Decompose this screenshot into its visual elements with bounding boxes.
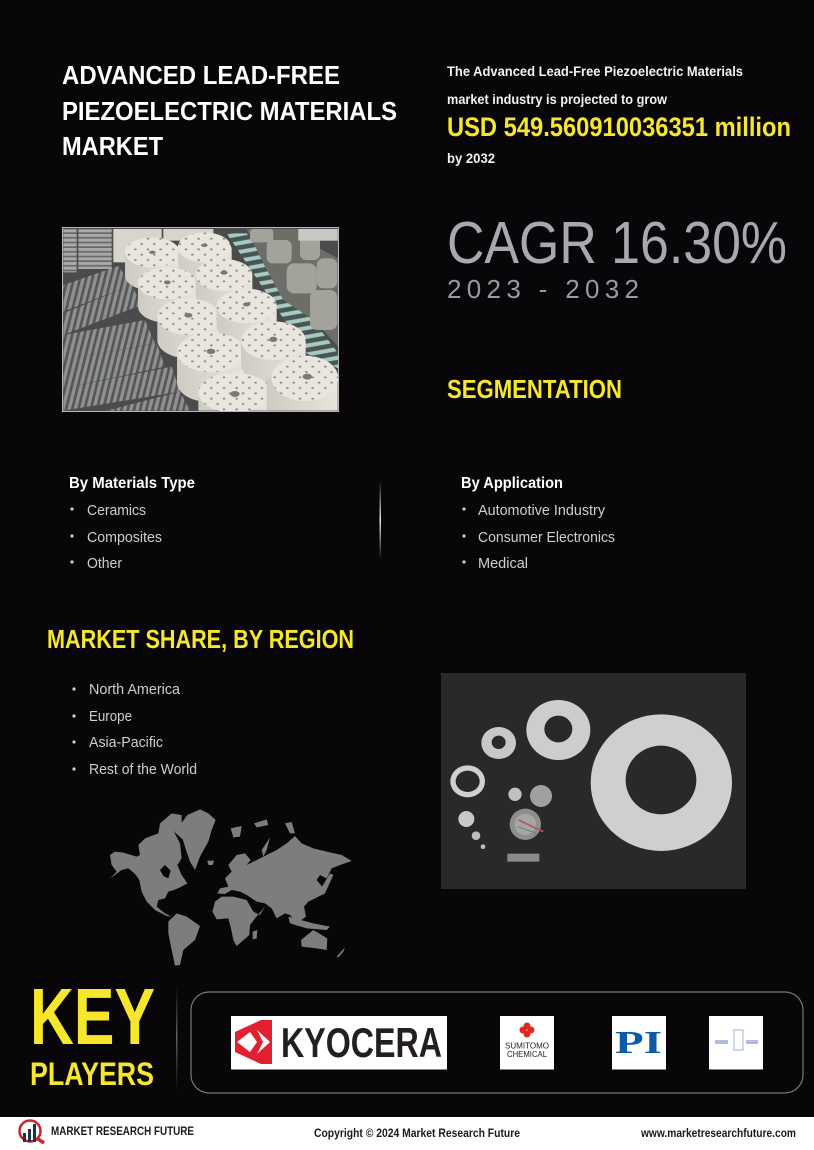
copyright: Copyright © 2024 Market Research Future	[314, 1126, 520, 1140]
list: regions: North America	[89, 681, 181, 698]
list: by materials type: Ceramics	[87, 502, 146, 519]
list: regions	[72, 681, 197, 778]
list: regions: Rest of the World	[89, 761, 197, 778]
title: ADVANCED LEAD-FREE	[62, 60, 340, 90]
logo: Sumitomo Chemical	[500, 1016, 554, 1070]
title: MARKET	[62, 131, 163, 161]
key players label: KEY	[30, 972, 155, 1061]
grey blocks	[247, 229, 338, 347]
title	[62, 60, 397, 161]
photo: ceramic discs	[62, 228, 338, 413]
logo: PI: PI	[615, 1024, 662, 1060]
segmentation heading: SEGMENTATION	[447, 374, 622, 404]
logo: PI	[612, 1016, 666, 1070]
stacked grey rings	[63, 229, 77, 272]
logo: Kyocera	[231, 1016, 447, 1070]
list: by materials type: By Materials Type	[69, 475, 195, 492]
footer	[0, 1117, 814, 1150]
list: regions: Asia-Pacific	[89, 734, 163, 751]
key players label	[30, 972, 155, 1092]
panel: key player logos	[191, 992, 803, 1093]
list: by application: Automotive Industry	[478, 502, 605, 519]
list: by application	[461, 475, 615, 572]
key players label: PLAYERS	[30, 1056, 154, 1092]
photo: piezo rings	[441, 673, 746, 889]
ridged cylinders	[63, 266, 190, 411]
brand name: MARKET RESEARCH FUTURE	[51, 1124, 194, 1138]
list: by application: Consumer Electronics	[478, 529, 615, 546]
top disc stacks	[113, 229, 162, 262]
list: by application: By Application	[461, 475, 563, 492]
title: PIEZOELECTRIC MATERIALS	[62, 96, 397, 126]
logo: fourth company	[709, 1016, 763, 1070]
list: by application: Medical	[478, 555, 528, 572]
list: by materials type: Composites	[87, 529, 162, 546]
list: by materials type	[69, 475, 195, 572]
market projection text	[447, 63, 791, 166]
icon: magnifier chart logo	[20, 1120, 44, 1143]
list: regions: Europe	[89, 708, 132, 725]
list: by materials type: Other	[87, 555, 122, 572]
market projection text: The Advanced Lead-Free Piezoelectric Materials	[447, 63, 743, 79]
world map	[110, 809, 352, 966]
teal comb	[227, 233, 338, 368]
logo: Sumitomo Chemical: CHEMICAL	[507, 1050, 548, 1059]
market share heading: MARKET SHARE, BY REGION	[47, 624, 354, 654]
CAGR period: 2023 - 2032	[447, 274, 639, 304]
logo: Kyocera: KYOCERA	[281, 1019, 442, 1066]
market projection text: by 2032	[447, 150, 495, 166]
centre holes	[149, 244, 312, 397]
logo: Sumitomo Chemical: SUMITOMO	[505, 1042, 549, 1050]
market projection text: market industry is projected to grow	[447, 91, 667, 107]
